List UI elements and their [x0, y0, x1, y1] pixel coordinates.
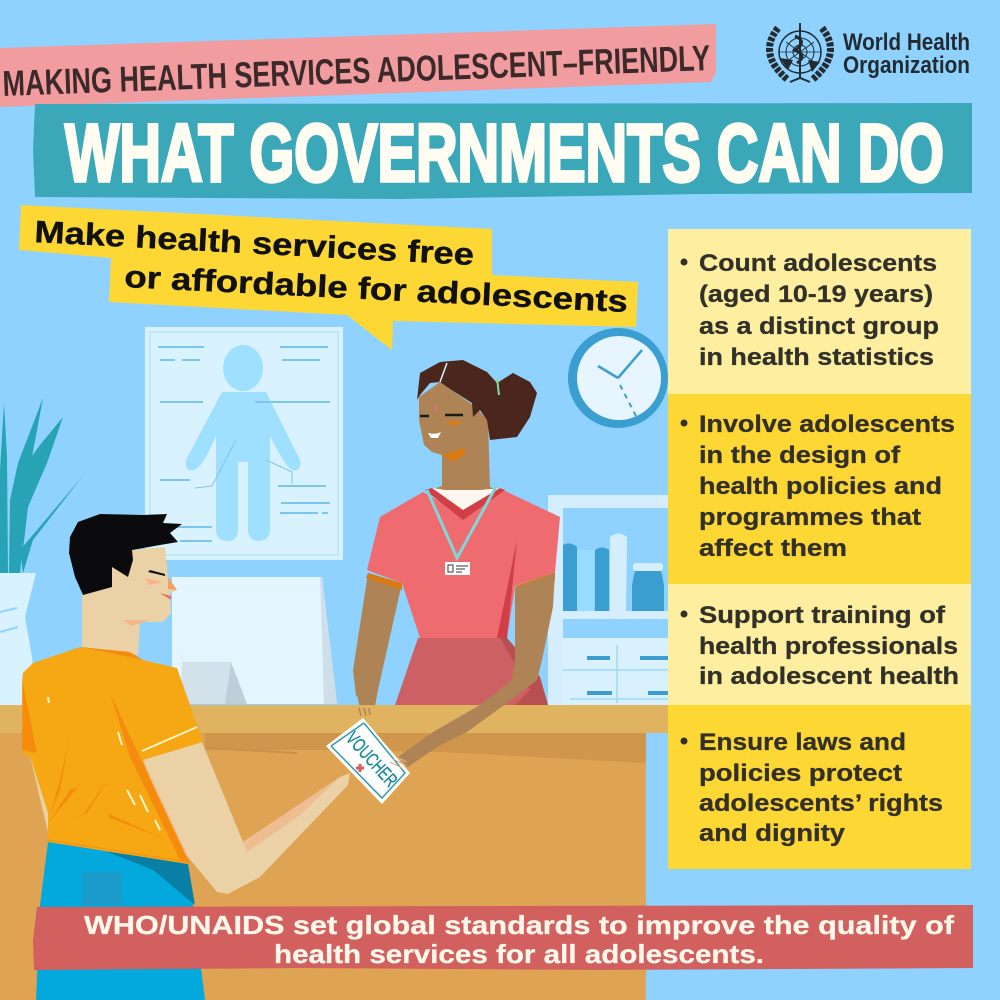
item: involve adolescents: Involve adolescents — [699, 411, 955, 438]
nurse fingers holding voucher — [390, 757, 407, 768]
item: support training: in adolescent health — [699, 663, 959, 690]
panel: illustrated clinic scene — [0, 327, 668, 1000]
banner: WHO/UNAIDS standards — [33, 905, 973, 970]
item: involve adolescents: in the design of — [699, 442, 901, 469]
callout: make health services free — [19, 205, 638, 350]
item: ensure laws: and dignity — [699, 820, 846, 847]
voucher card — [326, 718, 410, 804]
nurse at the counter — [353, 360, 560, 715]
logo: World Health Organization — [770, 23, 970, 82]
nurse fingers on desk — [359, 708, 370, 716]
voucher card: VOUCHER — [341, 728, 401, 791]
item: support training: health professionals — [699, 633, 958, 660]
wall poster of the human body — [145, 327, 343, 560]
shelves with bottles — [548, 495, 668, 705]
potted plant — [0, 398, 82, 705]
item: involve adolescents — [668, 394, 971, 584]
panel: action list — [668, 229, 971, 869]
banner: WHO/UNAIDS standards: health services for all adolescents. — [274, 939, 764, 969]
item: count adolescents: as a distinct group — [699, 313, 939, 340]
item: count adolescents: (aged 10-19 years) — [699, 281, 933, 308]
logo: World Health Organization: World Health — [843, 29, 970, 56]
callout: make health services free: or affordable for adolescents — [124, 259, 629, 319]
item: involve adolescents: programmes that — [699, 504, 921, 531]
item: ensure laws — [668, 705, 971, 869]
computer monitor — [172, 577, 337, 704]
callout: make health services free: Make health services free — [34, 214, 475, 272]
logo: World Health Organization: Organization — [843, 52, 970, 79]
reception desk — [0, 705, 668, 1000]
banner: WHO/UNAIDS standards: WHO/UNAIDS set global standards to improve the quality of — [84, 910, 954, 940]
item: count adolescents — [668, 229, 971, 394]
item: count adolescents: Count adolescents — [699, 250, 937, 277]
wall clock — [568, 328, 668, 428]
item: ensure laws: adolescents’ rights — [699, 790, 943, 817]
item: support training — [668, 584, 971, 705]
item: ensure laws: Ensure laws and — [699, 729, 906, 756]
banner: making health services adolescent-friendly: MAKING HEALTH SERVICES ADOLESCENT–FRIENDLY — [2, 37, 711, 104]
young man — [22, 514, 350, 1000]
item: involve adolescents: affect them — [699, 535, 847, 562]
item: ensure laws: policies protect — [699, 760, 902, 787]
item: involve adolescents: health policies and — [699, 473, 942, 500]
item: count adolescents: in health statistics — [699, 344, 934, 371]
nurse forearm reaching over desk — [398, 573, 555, 767]
item: support training: Support training of — [699, 602, 946, 629]
